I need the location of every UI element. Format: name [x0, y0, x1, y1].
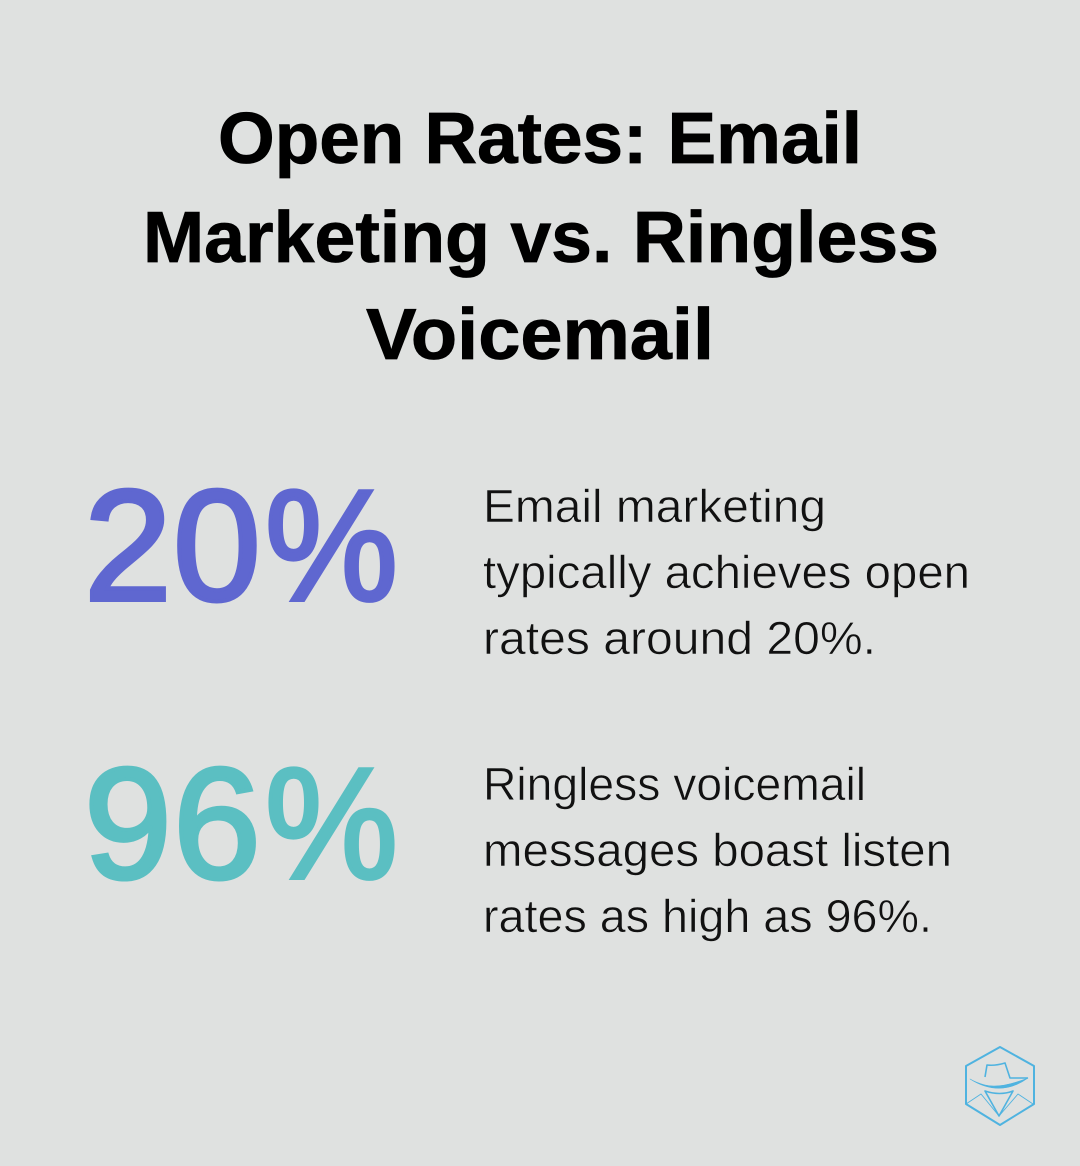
text block: ringless voicemail: messages boast listen [483, 824, 952, 876]
stat: 96%: 96 [84, 736, 261, 912]
title: Open Rates: Email [218, 99, 862, 179]
text block: email marketing: Email marketing [483, 480, 826, 532]
stat: 96% [84, 736, 398, 912]
icon: logo hexagon with hat [966, 1047, 1034, 1125]
stat: 20%: % [265, 458, 398, 634]
stat: 20%: 20 [84, 458, 261, 634]
title: Marketing vs. Ringless [143, 198, 939, 278]
title: Voicemail [366, 295, 714, 375]
text block: email marketing [483, 480, 970, 664]
text block: email marketing: typically achieves open [483, 546, 970, 598]
stat: 96%: % [265, 736, 398, 912]
text block: email marketing: rates around 20%. [483, 612, 876, 664]
text block: ringless voicemail: rates as high as 96%. [483, 890, 932, 942]
text block: ringless voicemail: Ringless voicemail [483, 758, 866, 810]
stat: 20% [84, 458, 398, 634]
text block: ringless voicemail [483, 758, 952, 942]
title [143, 99, 939, 375]
